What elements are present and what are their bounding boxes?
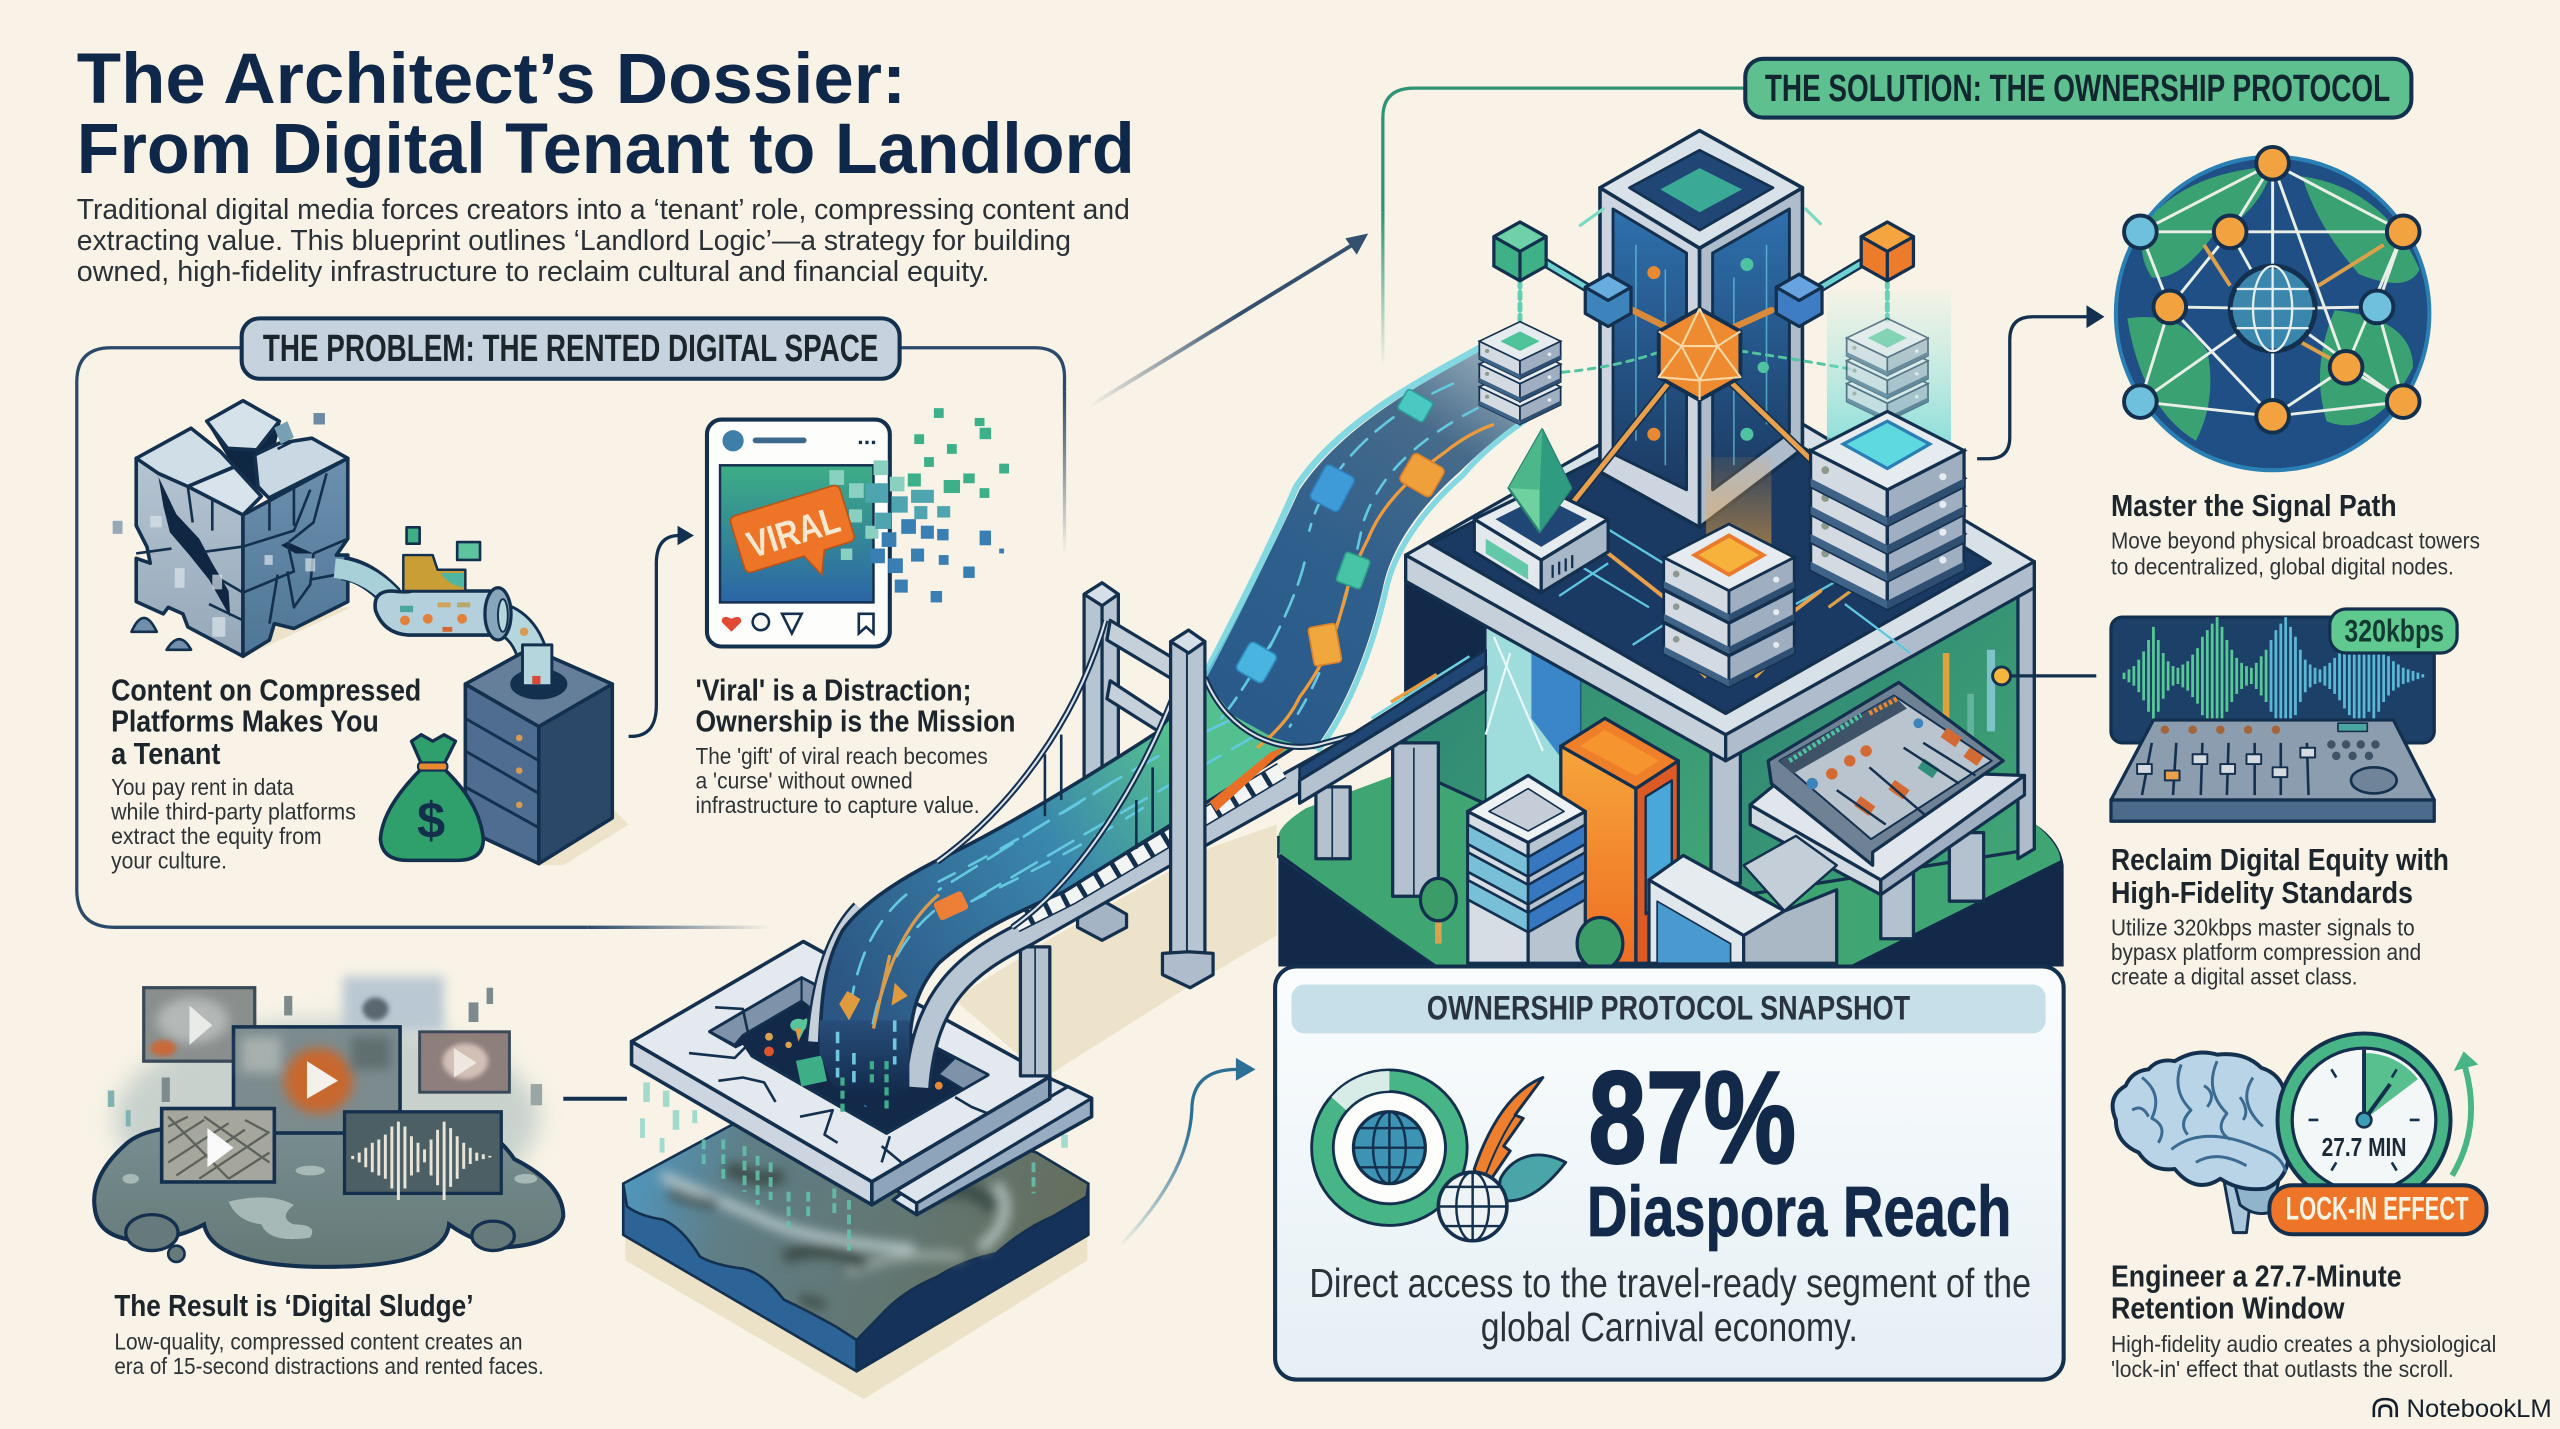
text: engineer retention window: High-fidelity audio creates a physiological [2111,1331,2496,1357]
text: viral is a distraction [696,674,1016,818]
snapshot header bar: OWNERSHIP PROTOCOL SNAPSHOT [1427,990,1910,1028]
text: engineer retention window: 'lock-in' effect that outlasts the scroll. [2111,1356,2454,1382]
text: content on compressed platforms: your culture. [111,848,227,874]
text: content on compressed platforms [110,674,421,874]
falling data in hole [764,1018,943,1107]
text: engineer retention window [2111,1260,2496,1382]
text: viral is a distraction: 'Viral' is a Distraction; [696,674,971,707]
icon: viral phone post [707,408,1009,647]
bridge rail fill [918,723,1399,1087]
icon: viral phone post: VIRAL [742,498,845,566]
arrow: to signal globe [1977,305,2104,459]
mixer desk in building [1750,682,2024,939]
text: content on compressed platforms: while third-party platforms [110,799,356,825]
text: reclaim digital equity: bypasx platform compression and [2111,939,2421,965]
text: viral is a distraction: a 'curse' without owned [696,768,913,794]
icon: audio waveform and mixer [2111,609,2457,821]
snapshot header bar [1291,984,2046,1033]
intro paragraph: extracting value. This blueprint outlines ‘Landlord Logic’—a strategy for building [77,225,1071,257]
badge: lock-in effect [2269,1185,2486,1234]
icon: compression pipe [335,527,545,689]
building platform [1406,375,2034,761]
text: content on compressed platforms: Platforms Makes You [111,705,379,738]
text: engineer retention window: Engineer a 27.7-Minute [2111,1260,2402,1293]
node cubes [1494,222,1913,327]
text: viral is a distraction: The 'gift' of viral reach becomes [696,743,988,769]
bridge tower rear [1020,583,1176,1076]
bridge fence slats [1016,771,1282,924]
snapshot description: Direct access to the travel-ready segment of the [1309,1260,2031,1306]
icon: retention clock [2278,1033,2478,1206]
text: master the signal path: Master the Signal Path [2111,490,2397,523]
solution header pill [1745,59,2411,118]
central orange hexagon node [1659,309,1740,400]
bridge rail [918,723,1399,1087]
data cards on stream [933,388,1446,921]
snapshot description: global Carnival economy. [1481,1304,1858,1350]
text: reclaim digital equity [2111,844,2449,989]
text: engineer retention window: Retention Window [2111,1292,2345,1325]
icon: server rack [465,645,629,865]
big server stack [1811,411,1964,609]
stat label: diaspora reach: Diaspora Reach [1587,1172,2011,1252]
intro paragraph: Traditional digital media forces creators into a ‘tenant’ role, compressing content and [77,194,1130,226]
text: digital sludge [114,1290,544,1379]
text: master the signal path [2111,490,2480,580]
icon: global node network [2116,147,2429,470]
bridge deck and ribbon [813,340,1527,1113]
problem header pill [242,318,900,379]
arrow: problem to viral [629,526,694,736]
right data stack [1847,318,1928,421]
notebooklm watermark: NotebookLM [2406,1395,2552,1423]
ground shadow band [953,824,1277,1078]
icon: digital sludge videos [94,976,563,1267]
text: master the signal path: to decentralized, global digital nodes. [2111,554,2454,580]
intro paragraph: owned, high-fidelity infrastructure to reclaim cultural and financial equity. [77,256,989,288]
solution connector fade [1382,212,1384,367]
arrow: diagonal to solution [1089,233,1368,407]
left data stack [1479,322,1561,424]
crystal node box [1474,429,1608,593]
badge: 320kbps: 320kbps [2344,614,2444,649]
text: content on compressed platforms: a Tenant [111,738,220,771]
icon: brain [2113,1052,2293,1233]
building ground [1278,653,2064,966]
icon: money bag: $ [417,792,445,849]
snapshot description [1309,1260,2031,1350]
text: digital sludge: The Result is ‘Digital Sludge’ [114,1290,474,1323]
text: reclaim digital equity: create a digital asset class. [2111,963,2358,989]
text: reclaim digital equity: High-Fidelity Standards [2111,877,2413,910]
problem header pill: THE PROBLEM: THE RENTED DIGITAL SPACE [263,327,878,369]
text: digital sludge: Low-quality, compressed content creates an [114,1328,522,1354]
stat: 87%: 87% [1589,1044,1796,1190]
connector dash to frame [563,1098,627,1100]
text: content on compressed platforms: Content on Compressed [111,674,421,707]
badge: 320kbps [2330,609,2457,653]
building walls [1406,555,2034,914]
solution connector line [1383,88,1745,212]
intro paragraph [77,194,1130,288]
bridge tower front and cables [937,620,1399,988]
callout dot and connector to audio [1993,667,2096,685]
text: viral is a distraction: infrastructure to capture value. [696,792,980,818]
city buildings [1420,718,1837,970]
text: reclaim digital equity: Utilize 320kbps master signals to [2111,914,2415,940]
icon: carnival feather and globe [1438,1078,1566,1241]
text: master the signal path: Move beyond physical broadcast towers [2111,528,2480,554]
glow beams [1706,291,1951,547]
panel: ownership protocol snapshot [1275,966,2064,1380]
panel: the problem frame [77,348,1064,927]
text: content on compressed platforms: extract the equity from [111,823,322,849]
badge: lock-in effect: LOCK-IN EFFECT [2286,1190,2469,1227]
broken frame [632,942,1092,1215]
network connections [1520,209,1887,612]
text: viral is a distraction: Ownership is the Mission [696,705,1016,738]
centre server stack [1664,524,1794,687]
icon: money bag [380,735,483,860]
text: content on compressed platforms: You pay rent in data [111,774,294,800]
title: The Architect’s Dossier: [77,39,906,119]
text: reclaim digital equity: Reclaim Digital Equity with [2111,844,2449,877]
icon: diaspora donut [1322,1081,1456,1215]
main tower [1600,131,1802,527]
text: digital sludge: era of 15-second distractions and rented faces. [114,1353,544,1379]
arrow: up curve to snapshot [1118,1058,1256,1247]
title: From Digital Tenant to Landlord [77,109,1135,189]
icon: crumbling content cube [113,401,351,656]
sludge base block [623,1082,1088,1399]
bridge inner road [1300,650,1486,896]
bridge fence [1016,771,1282,924]
icon: retention clock: 27.7 MIN [2322,1132,2406,1162]
title [77,39,1135,189]
